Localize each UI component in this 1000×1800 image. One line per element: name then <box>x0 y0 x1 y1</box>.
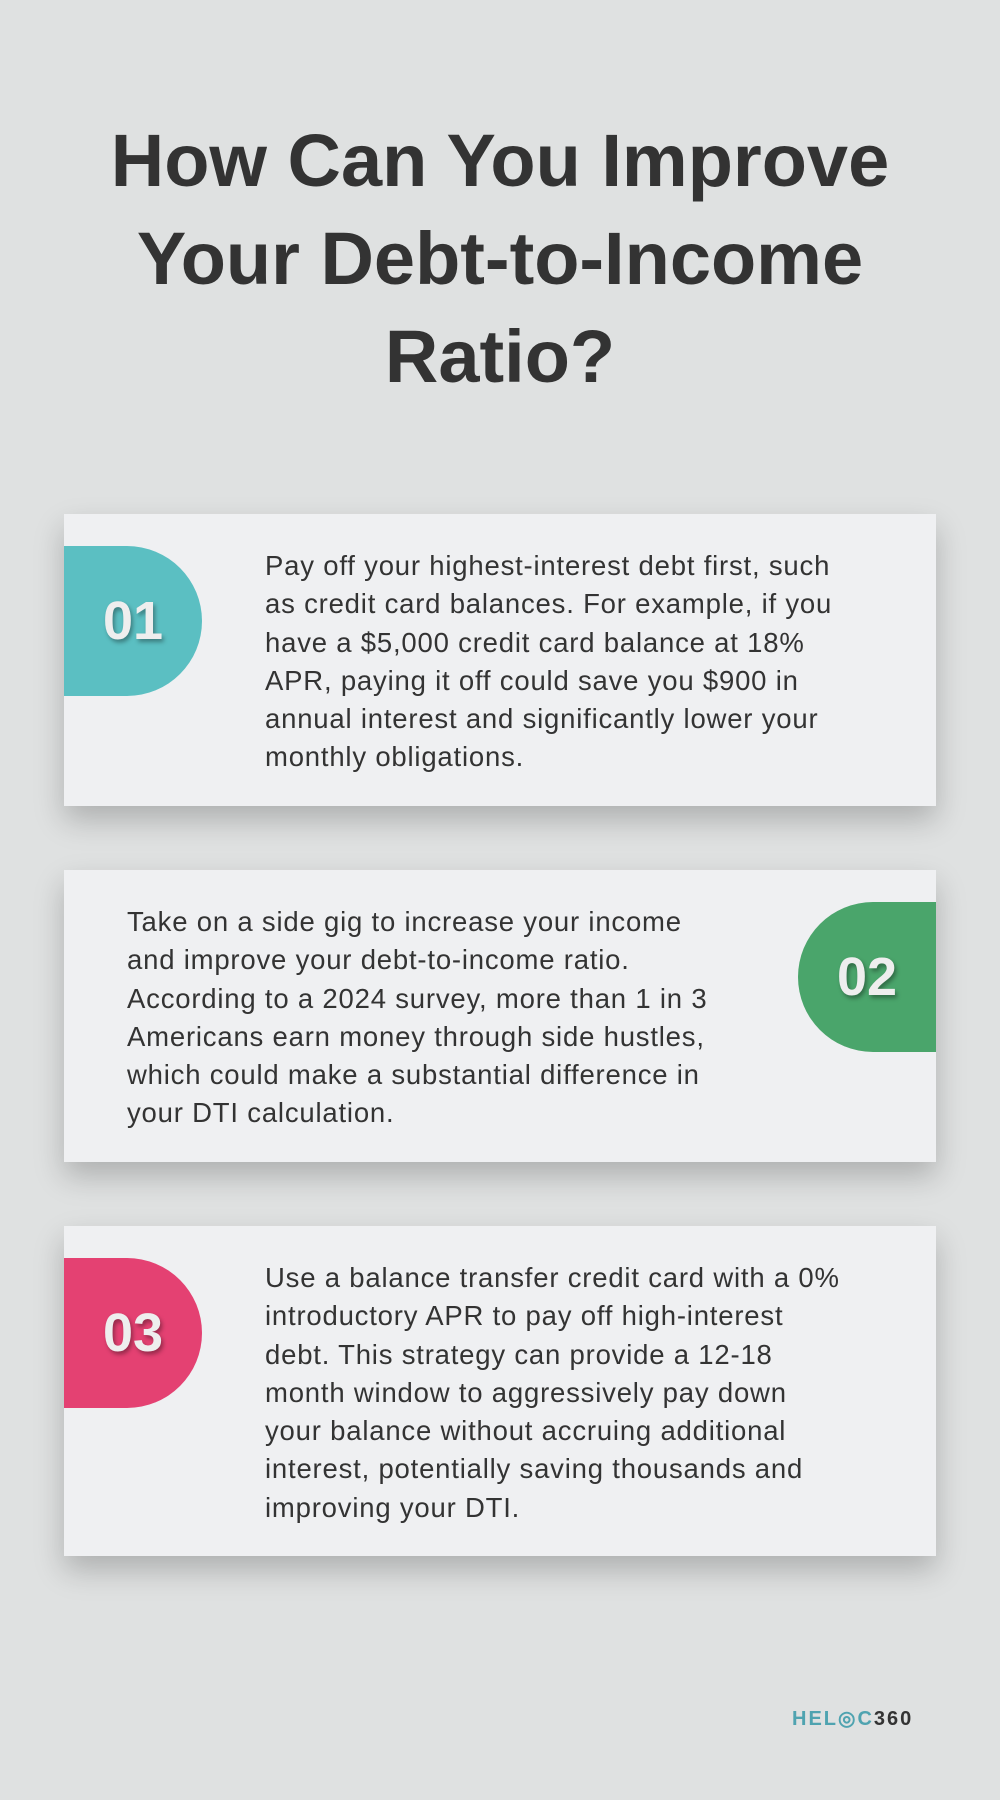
text step 1: Pay off your highest-interest debt first, such <box>265 550 830 581</box>
text step 1: annual interest and significantly lower your <box>265 703 818 734</box>
title: How Can You Improve <box>111 119 889 202</box>
text step 3: interest, potentially saving thousands and <box>265 1453 803 1484</box>
text step 3: your balance without accruing additional <box>265 1415 786 1446</box>
text step 1: monthly obligations. <box>265 741 524 772</box>
panel: step 1 <box>64 514 936 806</box>
title: Your Debt-to-Income <box>137 217 863 300</box>
text step 2: Americans earn money through side hustles, <box>127 1021 705 1052</box>
text step 2: According to a 2024 survey, more than 1 in 3 <box>127 983 707 1014</box>
badge 01: 01 <box>103 591 163 651</box>
badge 03: 03 <box>103 1303 163 1363</box>
panel: step 3 <box>64 1226 936 1556</box>
badge 01 <box>64 546 202 696</box>
badge 03 <box>64 1258 202 1408</box>
badge 02: 02 <box>837 947 897 1007</box>
title: Ratio? <box>385 315 615 398</box>
text step 1: have a $5,000 credit card balance at 18% <box>265 627 805 658</box>
text step 3 <box>265 1262 840 1523</box>
badge 02 <box>798 902 936 1052</box>
text step 3: improving your DTI. <box>265 1492 520 1523</box>
logo: HEL◎C360 <box>792 1708 913 1730</box>
text step 2: which could make a substantial difference in <box>127 1059 700 1090</box>
text step 2 <box>127 906 707 1128</box>
text step 3: Use a balance transfer credit card with a 0% <box>265 1262 840 1293</box>
text step 1: APR, paying it off could save you $900 in <box>265 665 799 696</box>
text step 2: your DTI calculation. <box>127 1097 394 1128</box>
text step 1: as credit card balances. For example, if you <box>265 588 832 619</box>
title <box>111 119 889 398</box>
text step 2: Take on a side gig to increase your income <box>127 906 682 937</box>
text step 3: introductory APR to pay off high-interest <box>265 1300 783 1331</box>
text step 1 <box>265 550 832 772</box>
text step 3: debt. This strategy can provide a 12-18 <box>265 1339 773 1370</box>
text step 3: month window to aggressively pay down <box>265 1377 787 1408</box>
text step 2: and improve your debt-to-income ratio. <box>127 944 630 975</box>
panel: step 2 <box>64 870 936 1162</box>
